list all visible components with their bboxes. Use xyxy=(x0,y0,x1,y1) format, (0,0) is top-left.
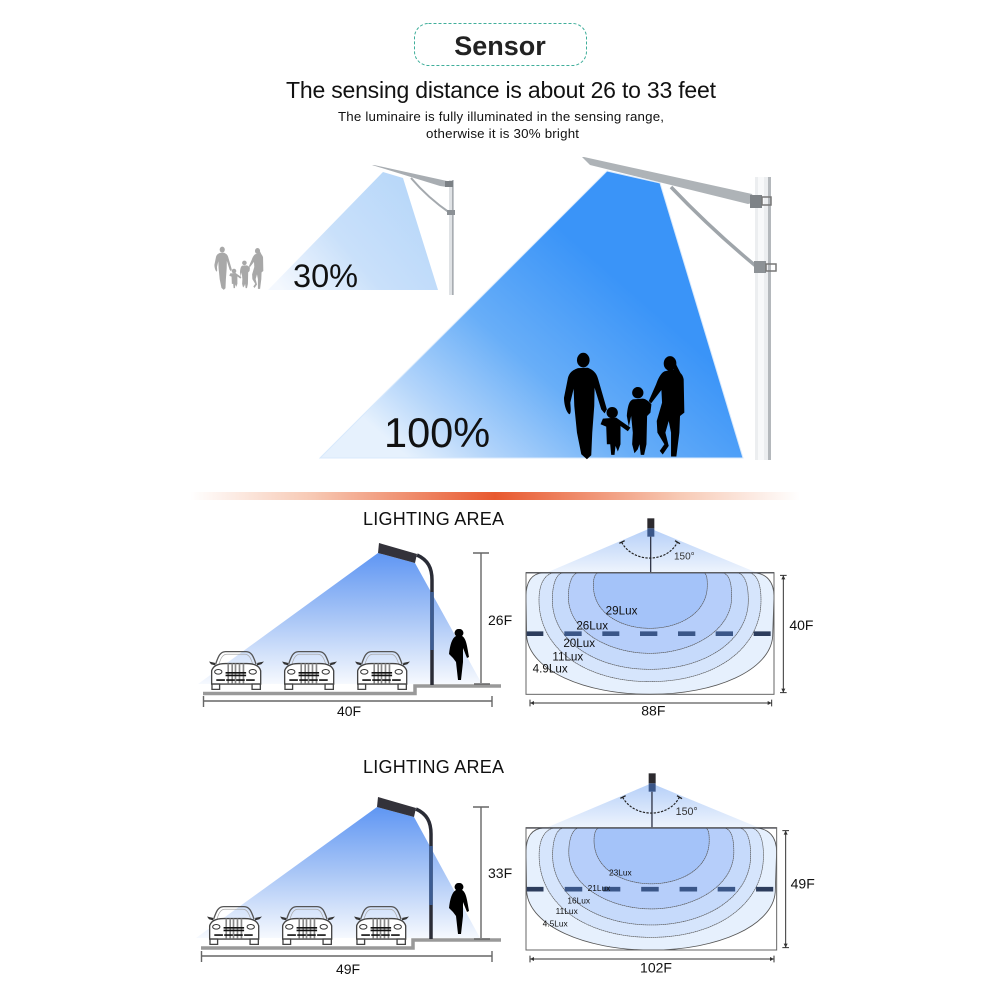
light fan xyxy=(547,783,759,828)
cars xyxy=(209,652,410,689)
dimension: depth 49F: 49F xyxy=(791,876,815,892)
road and kerb xyxy=(201,940,501,948)
lux labels: 29Lux xyxy=(606,604,638,617)
dimension: width 40F xyxy=(204,696,492,719)
dimension: depth 49F xyxy=(782,831,815,948)
icon: person xyxy=(449,883,469,934)
light beam xyxy=(196,807,480,938)
sensor head xyxy=(647,518,654,537)
text block: sensing description: otherwise it is 30% bright xyxy=(426,126,579,141)
lux labels: 4.9Lux xyxy=(533,662,568,675)
street lamp xyxy=(378,543,432,685)
heading: lighting area 2: LIGHTING AREA xyxy=(363,757,504,777)
lux labels: 20Lux xyxy=(563,637,595,650)
dimension: height 26F xyxy=(473,553,512,684)
sensor head xyxy=(649,773,656,792)
lighting zones xyxy=(526,537,774,694)
dimension: height 26F: 26F xyxy=(488,612,512,628)
dimension: depth 40F: 40F xyxy=(789,617,813,633)
light beam xyxy=(198,553,482,684)
outline xyxy=(526,828,777,950)
cars xyxy=(207,907,409,944)
lux labels: 21Lux xyxy=(588,883,611,893)
dimension: width 102F xyxy=(530,956,774,975)
label: 30%: 30% xyxy=(293,258,358,294)
light fan xyxy=(547,528,757,573)
lux labels: 11Lux xyxy=(552,651,583,664)
angle arc: 150° xyxy=(674,551,695,562)
lighting zones xyxy=(526,792,777,950)
dimension: width 102F: 102F xyxy=(640,959,672,975)
heading: sensing distance: The sensing distance is about 26 to 33 feet xyxy=(286,77,717,103)
angle arc: 150° xyxy=(676,806,698,818)
lux labels xyxy=(543,868,633,928)
panel: 30% brightness xyxy=(214,165,455,295)
light beam: dim xyxy=(268,172,438,290)
plan view diagram 1 xyxy=(526,518,813,719)
lux labels xyxy=(533,604,638,675)
light beam: full xyxy=(320,171,743,458)
dimension: height 33F xyxy=(473,807,512,939)
heading: lighting area 1: LIGHTING AREA xyxy=(363,509,504,529)
plan view diagram 2 xyxy=(526,773,815,975)
icon: family silhouette xyxy=(564,353,684,459)
dimension: depth 40F xyxy=(780,575,813,693)
dimension: width 88F xyxy=(530,700,772,719)
lux labels: 26Lux xyxy=(576,620,608,633)
dimension: width 40F: 40F xyxy=(337,703,361,719)
lux labels: 16Lux xyxy=(567,896,591,906)
lux labels: 4.5Lux xyxy=(543,918,569,928)
side view diagram 1 xyxy=(198,543,512,719)
text block: sensing description: The luminaire is fully illuminated in the sensing range, xyxy=(338,109,664,124)
text block: sensing description xyxy=(338,109,664,141)
lux labels: 11Lux xyxy=(556,906,579,916)
street lamp: large xyxy=(582,157,776,460)
dimension: width 49F: 49F xyxy=(336,961,360,977)
dimension: width 49F xyxy=(202,951,492,977)
dimension: width 88F: 88F xyxy=(641,703,665,719)
divider: gradient bar xyxy=(190,492,800,500)
icon: grey family xyxy=(214,247,263,290)
title: Sensor xyxy=(454,31,546,61)
panel: 100% brightness xyxy=(320,157,776,460)
angle arc xyxy=(620,796,698,818)
outline xyxy=(526,573,774,694)
lux labels: 23Lux xyxy=(609,868,633,878)
icon: person xyxy=(449,629,469,680)
road and kerb xyxy=(203,686,501,694)
label: 100%: 100% xyxy=(384,409,490,456)
title xyxy=(414,24,586,66)
street lamp: small xyxy=(372,165,455,295)
angle arc xyxy=(619,541,695,562)
dimension: height 33F: 33F xyxy=(488,865,512,881)
street lamp xyxy=(377,797,431,939)
side view diagram 2 xyxy=(196,797,512,977)
